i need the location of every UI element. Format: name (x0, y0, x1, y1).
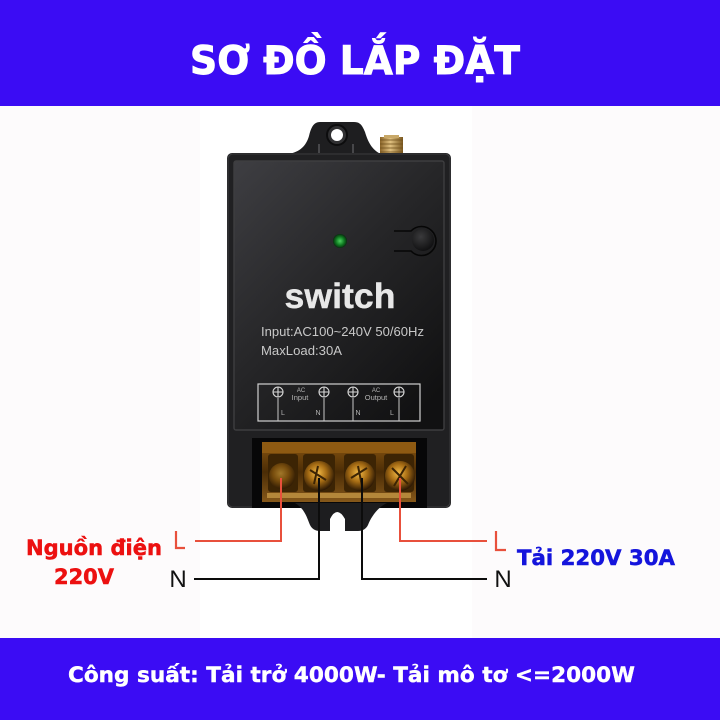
top banner (0, 0, 720, 106)
bottom banner (0, 638, 720, 720)
button (394, 226, 436, 256)
label: power source: 220V (54, 565, 115, 589)
wiring label box: Input (292, 393, 309, 402)
wiring label box: L (390, 410, 394, 417)
label: power source (26, 536, 162, 589)
terminal recess (252, 438, 427, 508)
terminal letter: input N: N (169, 566, 187, 593)
status LED (333, 234, 347, 248)
title: SƠ ĐỒ LẮP ĐẶT (190, 32, 520, 84)
label: power source: Nguồn điện (26, 536, 162, 560)
device: switch relay (227, 122, 451, 531)
bottom mounting tab (295, 503, 387, 531)
wire: output neutral (362, 478, 487, 579)
terminal block (262, 442, 416, 502)
wiring label box (258, 384, 420, 421)
terminal screws (269, 463, 295, 489)
body (227, 153, 451, 508)
brand: switch: switch (284, 277, 396, 316)
antenna connector (380, 135, 403, 154)
wiring label box: Output (365, 393, 388, 402)
wiring label box: AC (297, 388, 306, 394)
mounting tab top (288, 122, 381, 154)
wiring label box: L (281, 410, 285, 417)
wiring label box: N (355, 410, 361, 417)
input rating: Input:AC100~240V 50/60Hz (261, 325, 424, 339)
terminal letter: output N: N (494, 566, 512, 593)
terminal letter: output L (496, 531, 506, 550)
terminal letter: input L (176, 531, 185, 548)
label: load: Tải 220V 30A (517, 546, 676, 570)
power specification: Công suất: Tải trở 4000W- Tải mô tơ <=2000W (68, 663, 635, 687)
max load: MaxLoad:30A (261, 344, 343, 358)
front panel (234, 161, 444, 430)
wiring label box: AC (372, 388, 381, 394)
wiring label box: N (315, 410, 321, 417)
wire: input neutral (194, 478, 319, 579)
wire: input live (195, 478, 281, 541)
wire: output live (400, 478, 487, 541)
